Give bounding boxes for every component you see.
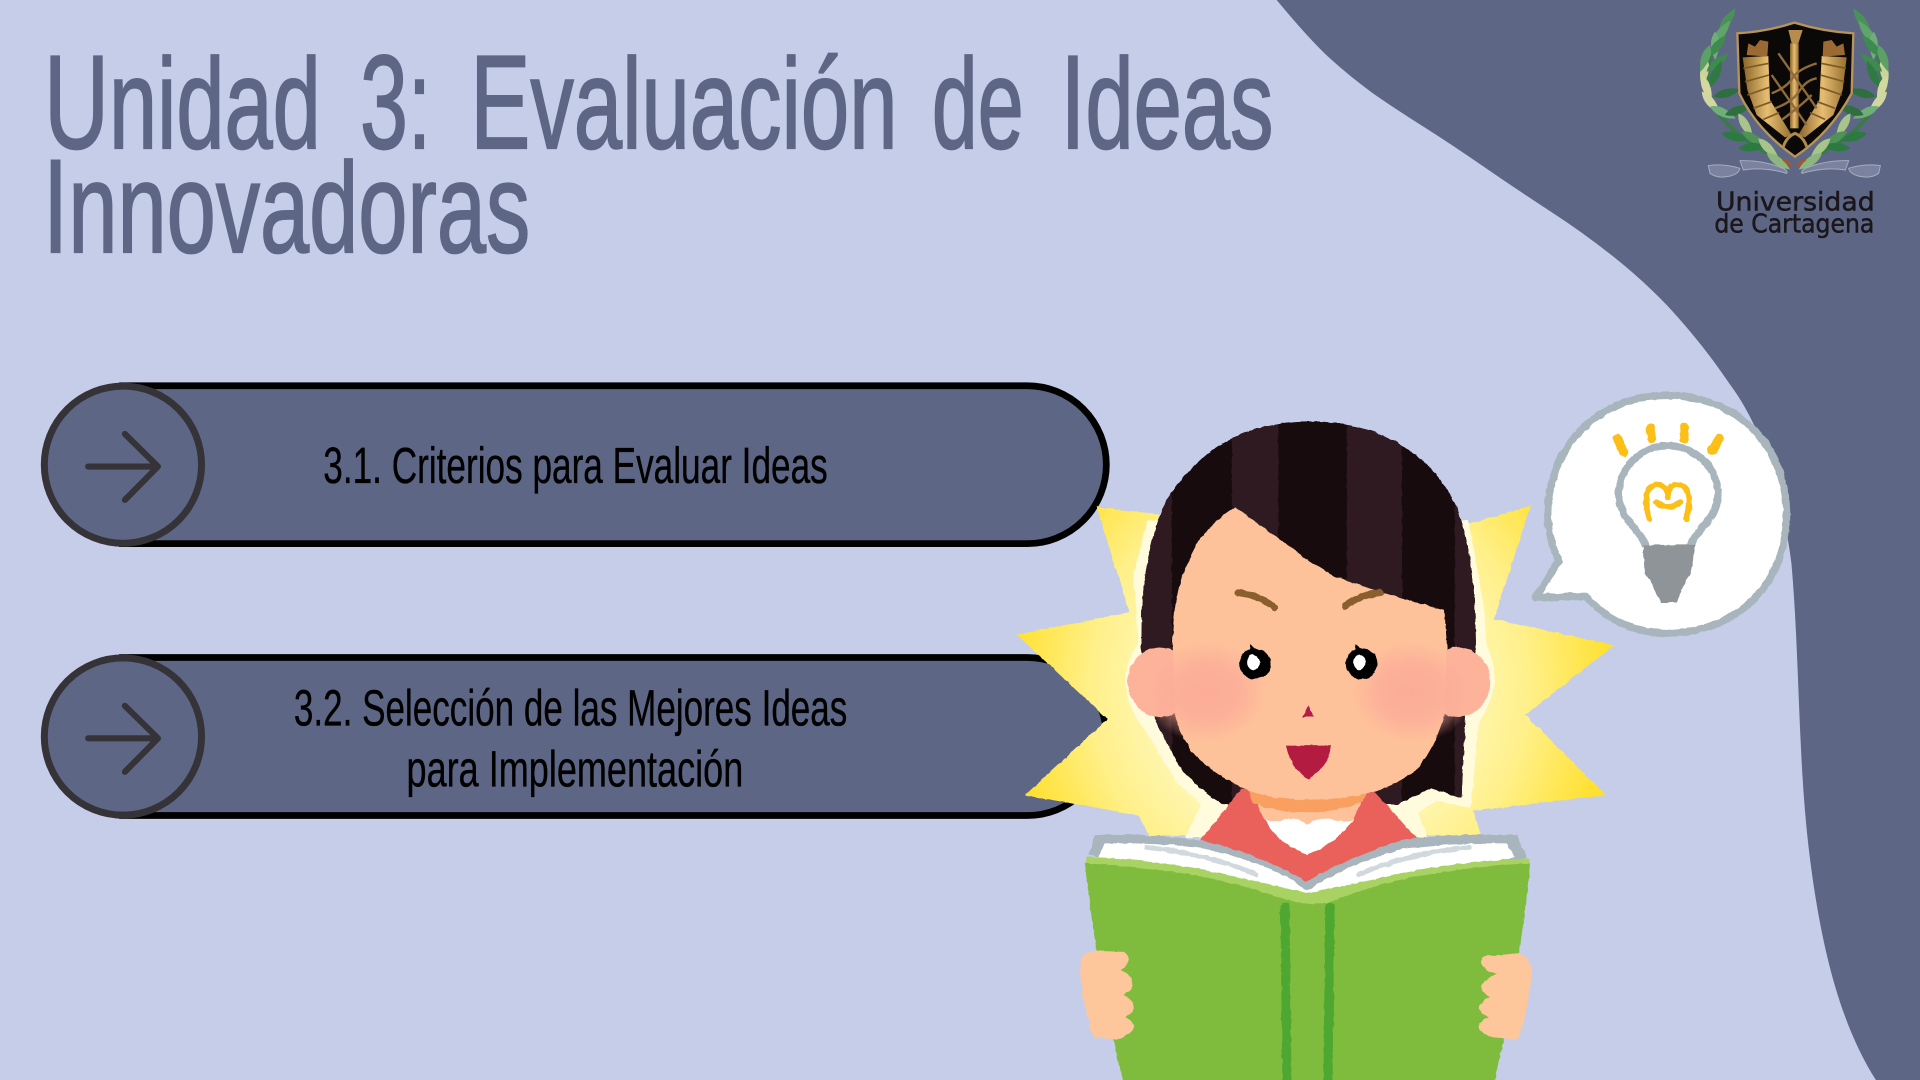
menu item 3.2 [44, 658, 1106, 816]
icon: arrow in circle [44, 386, 202, 543]
cover [1085, 857, 1530, 912]
logo wordmark: Universidad [1716, 187, 1875, 217]
hair [1133, 416, 1482, 808]
label [294, 680, 847, 798]
starburst [1017, 506, 1614, 835]
left hand [1080, 950, 1134, 1040]
cheeks [1145, 640, 1267, 743]
eyebrows [1238, 593, 1380, 607]
pill bar [122, 386, 1106, 544]
laurel wreath [1695, 6, 1893, 177]
label: para Implementación [407, 741, 743, 798]
pill bar [122, 658, 1106, 816]
title: Evaluación [470, 28, 898, 177]
title: de [932, 33, 1024, 176]
nose [1302, 706, 1314, 717]
speech bubble with light bulb [1536, 396, 1787, 633]
label: 3.1. Criterios para Evaluar Ideas [323, 437, 828, 494]
illustration: girl reading with idea [1017, 396, 1787, 1080]
bulb [1619, 446, 1718, 546]
title: Innovadoras [43, 132, 530, 281]
ears [1128, 647, 1191, 717]
curved dark corner shape [1277, 0, 1920, 1080]
bubble [1536, 396, 1787, 633]
eyes [1239, 644, 1378, 679]
horns of plenty [1743, 56, 1792, 137]
title: Unidad [44, 28, 321, 177]
icon: arrow in circle [44, 658, 202, 815]
logo wordmark: de Cartagena [1714, 208, 1874, 238]
university logo [1695, 6, 1893, 238]
light rays [1618, 427, 1719, 452]
right hand [1479, 953, 1532, 1040]
face [1172, 507, 1447, 800]
spine lines [1285, 907, 1330, 1080]
title: 3: [360, 28, 431, 177]
title [43, 28, 1273, 281]
neck and collar [1201, 784, 1418, 885]
logo wordmark [1714, 187, 1875, 238]
central fasces [1790, 43, 1799, 128]
menu item 3.1 [44, 386, 1106, 544]
filament [1646, 485, 1689, 519]
cream halo around figure [1126, 520, 1495, 838]
pages [1088, 834, 1527, 906]
title: Ideas [1060, 28, 1273, 177]
shield [1737, 23, 1853, 157]
label: 3.2. Selección de las Mejores Ideas [294, 680, 847, 737]
mouth [1286, 745, 1331, 780]
open book [1085, 834, 1530, 1080]
